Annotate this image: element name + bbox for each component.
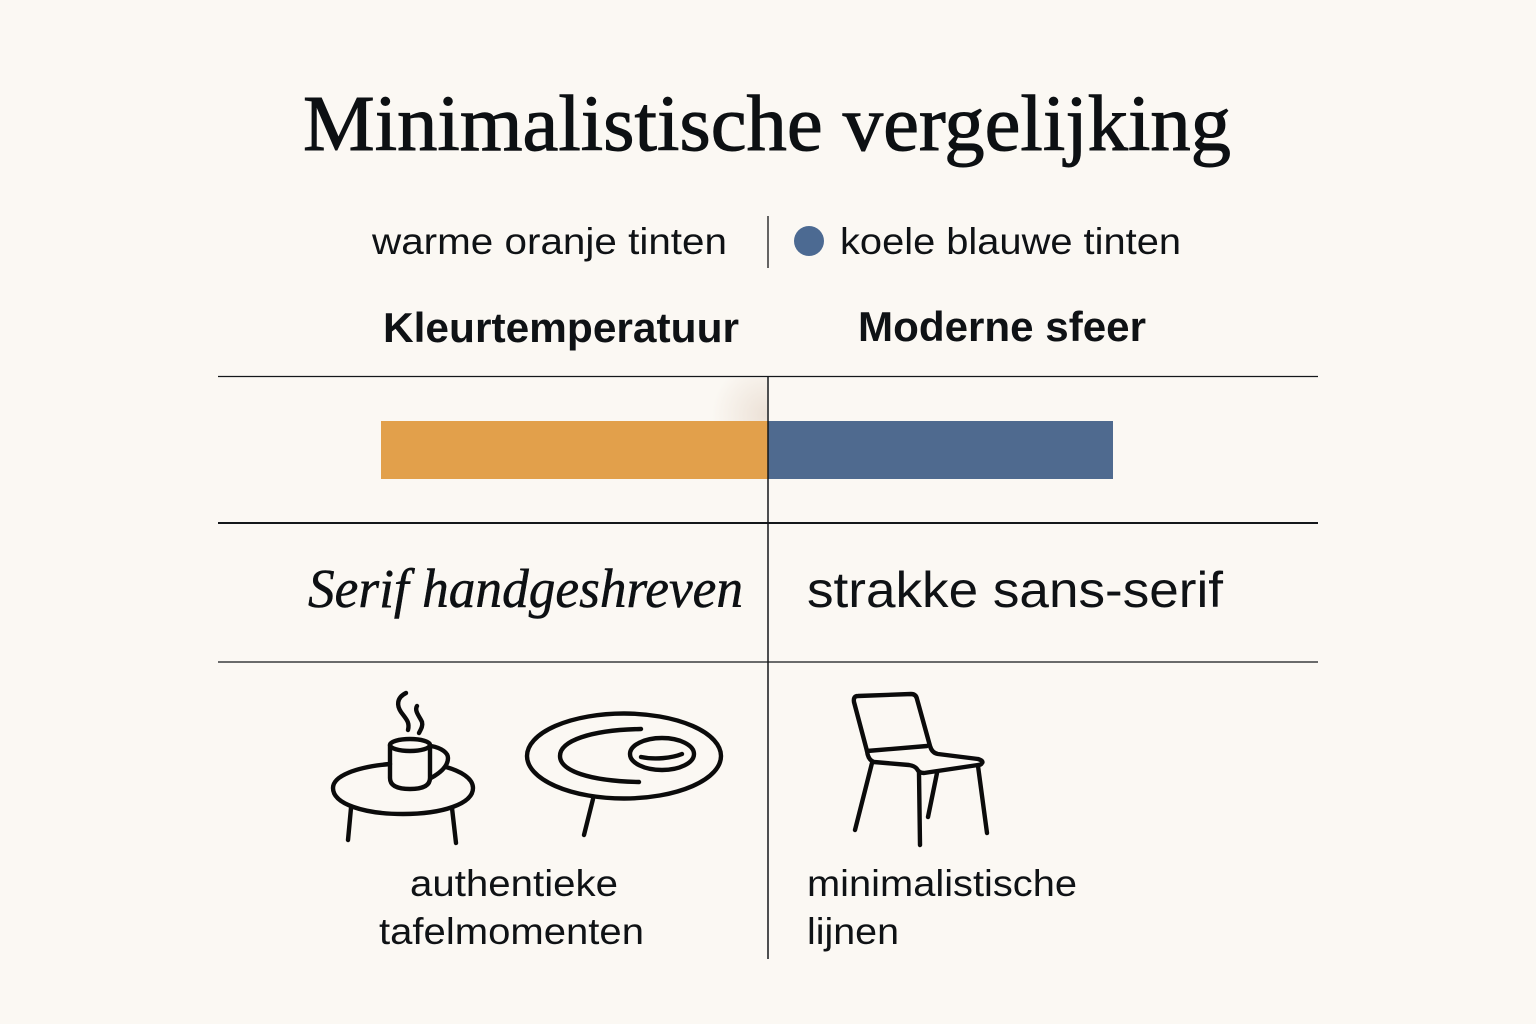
orange bar: [381, 421, 768, 479]
caption: minimalist lines: [807, 863, 1077, 952]
title: Minimalistische vergelijking: [303, 81, 1231, 168]
column heading: modern atmosphere: Moderne sfeer: [858, 303, 1146, 350]
text: serif handwritten: Serif handgeshreven: [308, 558, 743, 619]
caption: authentic table moments: authentieke: [410, 863, 618, 904]
icon: table with coffee cup: [333, 693, 473, 843]
caption: minimalist lines: minimalistische: [807, 863, 1077, 904]
legend: cool blue tones: koele blauwe tinten: [840, 221, 1181, 262]
caption: minimalist lines: lijnen: [807, 911, 899, 952]
caption: authentic table moments: [379, 863, 644, 952]
legend: blue dot: [794, 226, 824, 256]
caption: authentic table moments: tafelmomenten: [379, 911, 644, 952]
text: clean sans-serif: strakke sans-serif: [807, 562, 1223, 618]
blue bar: [768, 421, 1113, 479]
icon: minimalist chair: [854, 694, 987, 845]
legend: warm orange tones: warme oranje tinten: [371, 221, 727, 262]
comparison table lines: [218, 376, 1318, 959]
icon: round table with plate: [527, 714, 721, 835]
column heading: colour temperature: Kleurtemperatuur: [383, 304, 739, 351]
colour bar chart: [381, 378, 1113, 479]
legend: [371, 216, 1181, 268]
